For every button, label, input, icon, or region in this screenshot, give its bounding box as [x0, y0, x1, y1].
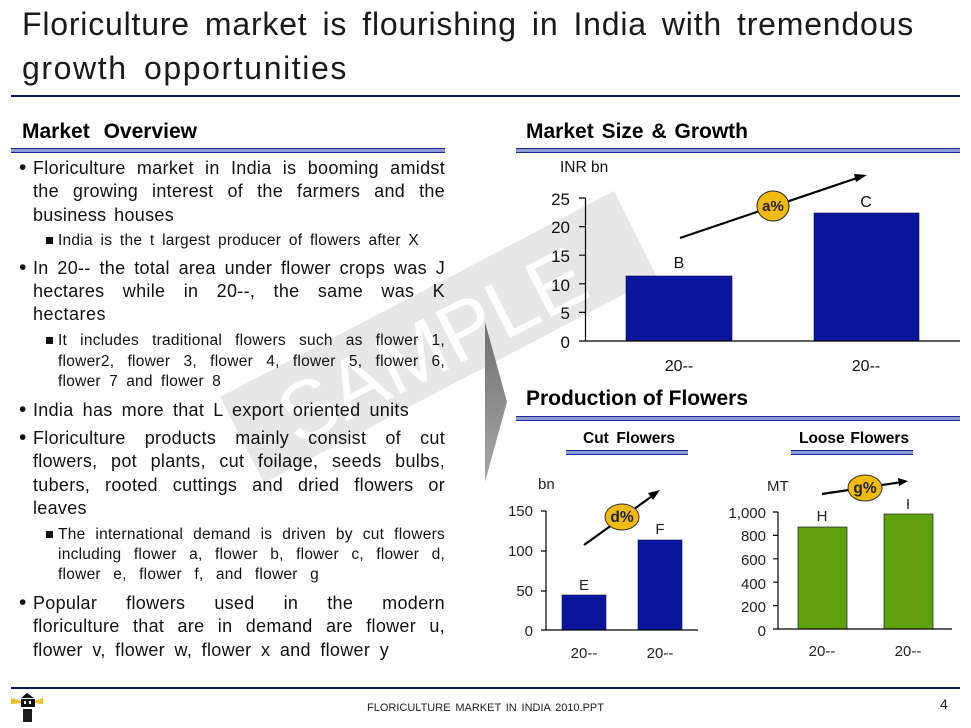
bullet group: floriculture products: leaves: [33, 498, 87, 518]
arrow: growth d%: d%: [610, 509, 634, 526]
chart: cut flowers bar chart: E: [579, 577, 589, 594]
chart: loose flowers bar chart: 200: [741, 599, 766, 616]
chart: market size bar chart: 25: [551, 190, 570, 209]
chart: loose flowers bar chart: 600: [741, 552, 766, 569]
arrow: growth d%: [584, 490, 660, 545]
bullet group: area under flower crops: flower2, flower 3, flower 4, flower 5, flower 6,: [58, 353, 445, 370]
bullet group: popular flowers: floriculture that are in demand are flower u,: [33, 616, 445, 636]
bullet group: area under flower crops: flower 7 and flower 8: [58, 373, 221, 390]
chart: loose flowers bar chart: MT: [767, 478, 789, 495]
bullet group: floriculture products: flower e, flower f, and flower g: [58, 566, 319, 583]
bullet group: floriculture products: including flower a, flower b, flower c, flower d,: [58, 546, 445, 563]
chart: loose flowers bar chart: 0: [758, 623, 766, 640]
bullet group: export oriented units: •: [19, 398, 26, 421]
bullet group: area under flower crops: In 20-- the total area under flower crops was J: [33, 258, 445, 278]
chart: loose flowers bar chart: 800: [741, 528, 766, 545]
chart: cut flowers bar chart: bn: [538, 476, 555, 493]
chart: cut flowers bar chart: 50: [516, 583, 533, 600]
bullet group: area under flower crops: It includes traditional flowers such as flower 1,: [58, 332, 445, 349]
chart: market size bar chart: 0: [561, 333, 570, 352]
heading: cut flowers: Cut Flowers: [583, 430, 675, 447]
chart: market size bar chart: C: [860, 194, 872, 211]
bullet group: floriculture products: [19, 426, 445, 583]
bullet group: floriculture products: tubers, rooted cuttings and dried flowers or: [33, 475, 445, 495]
chart: cut flowers bar chart: 150: [508, 503, 533, 520]
bullet group: popular flowers: [19, 591, 445, 660]
title: Floriculture market is flourishing in India with tremendous: [22, 6, 914, 42]
chart: cut flowers bar chart: 20--: [647, 645, 673, 662]
chart: market size bar chart: 20: [551, 218, 570, 237]
bullet group: export oriented units: India has more that L export oriented units: [33, 400, 409, 420]
bullet group: floriculture products: •: [19, 426, 26, 449]
panel: market overview: [11, 120, 445, 660]
chart: market size bar chart: 20--: [852, 358, 880, 375]
title: growth opportunities: [22, 50, 348, 86]
heading: market size and growth: Market Size & Growth: [526, 120, 748, 143]
bullet group: area under flower crops: •: [19, 256, 26, 279]
bullet group: floriculture products: The international demand is driven by cut flowers: [58, 526, 445, 543]
bullet group: area under flower crops: [19, 256, 445, 390]
arrow: growth a%: a%: [762, 198, 784, 215]
chart: loose flowers bar chart: 20--: [895, 643, 921, 660]
bullet group: floriculture products: Floriculture products mainly consist of cut: [33, 428, 445, 448]
chart: loose flowers bar chart: I: [906, 496, 910, 513]
chart: loose flowers bar chart: 400: [741, 576, 766, 593]
bullet group: market booming: Floriculture market in India is booming amidst: [33, 158, 445, 178]
arrow: growth a%: [680, 174, 867, 238]
chart: cut flowers bar chart: F: [655, 521, 665, 538]
bullet group: market booming: India is the t largest producer of flowers after X: [58, 232, 419, 249]
chart: market size bar chart: B: [674, 255, 684, 272]
bullet group: market booming: business houses: [33, 205, 174, 225]
chart: market size bar chart: 10: [551, 276, 570, 295]
bullet group: area under flower crops: hectares: [33, 304, 106, 324]
chart: cut flowers bar chart: 0: [525, 623, 533, 640]
bullet group: market booming: •: [19, 156, 26, 179]
chart: market size bar chart: 5: [561, 304, 570, 323]
heading: loose flowers: Loose Flowers: [799, 430, 909, 447]
footer text: FLORICULTURE MARKET IN INDIA 2010.PPT: [367, 702, 604, 714]
bullet group: floriculture products: flowers, pot plants, cut foilage, seeds bulbs,: [33, 451, 445, 471]
chart: loose flowers bar chart: H: [817, 508, 827, 525]
page number: 4: [940, 696, 948, 712]
chart: cut flowers bar chart: 100: [508, 543, 533, 560]
bullet group: popular flowers: Popular flowers used in the modern: [33, 593, 445, 613]
chart: market size bar chart: 15: [551, 247, 570, 266]
arrow: growth g%: g%: [853, 480, 877, 497]
title: [22, 6, 914, 86]
arrow: growth g%: [822, 475, 908, 501]
chart: loose flowers bar chart: 20--: [809, 643, 835, 660]
chart: cut flowers bar chart: 20--: [571, 645, 597, 662]
chart: market size bar chart: INR bn: [560, 159, 608, 176]
chart: loose flowers bar chart: 1,000: [728, 505, 766, 522]
heading: production of flowers: Production of Flowers: [526, 387, 748, 410]
bullet group: popular flowers: flower v, flower w, flower x and flower y: [33, 640, 389, 660]
chart: market size bar chart: 20--: [665, 358, 693, 375]
bullet group: popular flowers: •: [19, 591, 26, 614]
bullet group: market booming: the growing interest of the farmers and the: [33, 181, 445, 201]
watermark: SAMPLE band: SAMPLE: [264, 230, 602, 462]
heading: market overview: Market Overview: [22, 120, 197, 143]
bullet group: area under flower crops: hectares while in 20--, the same was K: [33, 281, 445, 301]
bullet group: market booming: [19, 156, 445, 249]
